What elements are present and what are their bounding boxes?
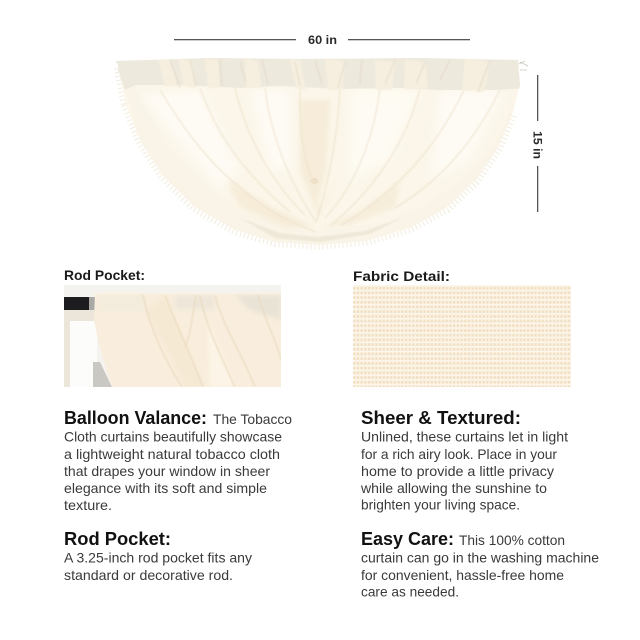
rod pocket gathers <box>166 85 484 92</box>
text block: rod pocket: standard or decorative rod. <box>64 567 233 583</box>
text block: balloon valance: Balloon Valance: <box>64 407 207 428</box>
heading: rod pocket photo: Rod Pocket: <box>64 267 145 283</box>
text block: balloon valance: elegance with its soft and simple <box>64 480 267 496</box>
dimension: 15 in height <box>530 75 544 212</box>
heading: fabric detail photo: Fabric Detail: <box>353 268 450 284</box>
photo: fabric weave texture <box>353 285 571 387</box>
text block: easy care: for convenient, hassle-free home <box>361 567 564 583</box>
text block: easy care: Easy Care: <box>361 528 454 549</box>
text block: sheer and textured <box>360 407 568 512</box>
text block: balloon valance <box>64 407 292 513</box>
balloon valance curtain <box>110 50 530 250</box>
curtain body <box>117 58 520 245</box>
fold lines <box>143 295 281 387</box>
text block: balloon valance: The Tobacco <box>213 411 292 427</box>
text block: easy care: This 100% cotton <box>459 532 565 548</box>
text block: balloon valance: a lightweight natural tobacco cloth <box>64 446 280 462</box>
text block: balloon valance: that drapes your window in sheer <box>64 463 270 479</box>
inner folds <box>225 100 400 228</box>
text block: sheer and textured: Unlined, these curtains let in light <box>361 428 568 444</box>
curtain rod <box>64 297 89 310</box>
text block: sheer and textured: brighten your living space. <box>361 496 520 512</box>
outer swag band <box>126 85 514 245</box>
text block: rod pocket: A 3.25-inch rod pocket fits any <box>64 550 252 566</box>
dimension: 15 in height: 15 in <box>530 131 544 159</box>
photo: rod pocket close-up <box>64 285 281 387</box>
curtain fringe <box>116 61 528 247</box>
fold lines <box>160 88 500 232</box>
center knot <box>310 178 318 184</box>
text block: sheer and textured: Sheer & Textured: <box>361 407 521 428</box>
text block: sheer and textured: home to provide a little privacy <box>361 463 554 479</box>
text block: balloon valance: texture. <box>64 497 112 513</box>
draped fabric <box>94 293 281 387</box>
text block: easy care: care as needed. <box>361 584 459 600</box>
text block: balloon valance: Cloth curtains beautifully showcase <box>64 428 282 444</box>
text block: easy care: curtain can go in the washing machine <box>361 550 599 566</box>
rod pocket band <box>117 58 520 90</box>
text block: sheer and textured: while allowing the sunshine to <box>360 480 547 496</box>
text block: sheer and textured: for a rich airy look. Place in your <box>361 446 557 462</box>
text block: easy care <box>361 528 599 600</box>
text block: rod pocket <box>64 528 252 583</box>
text block: rod pocket: Rod Pocket: <box>64 528 171 549</box>
window frame <box>64 310 96 387</box>
dimension: 60 in width: 60 in <box>308 33 337 47</box>
